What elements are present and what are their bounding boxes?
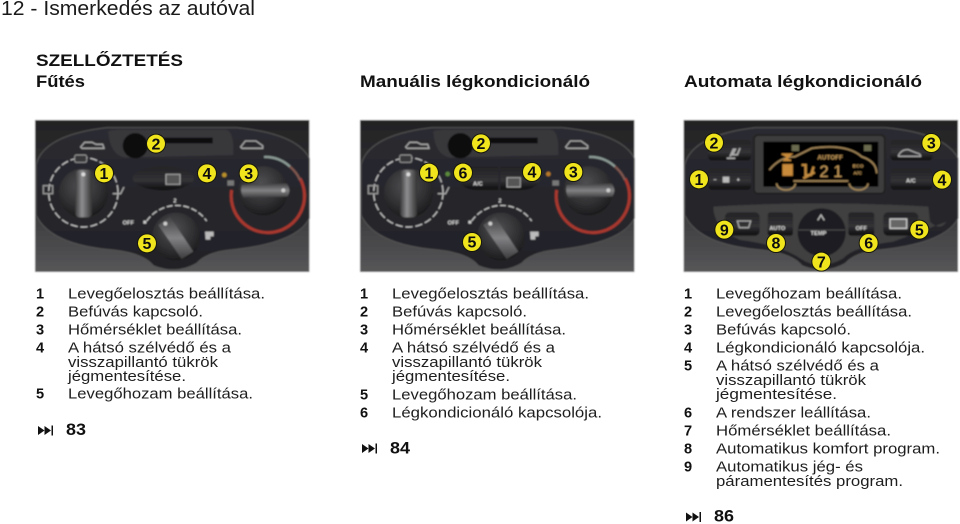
legend: manual AC: 3 — [360, 322, 368, 338]
panel: automatic AC controls photo: A/C — [906, 179, 916, 185]
callouts 1-6 — [419, 133, 583, 252]
column heading: automatic AC: Automata légkondicionáló — [684, 72, 922, 91]
legend: automatic AC: Hőmérséklet beállítása. — [716, 424, 891, 440]
panel: heating controls photo: 2 — [173, 198, 176, 204]
legend: heating: jégmentesítése. — [67, 369, 186, 385]
panel: automatic AC controls photo: ECO — [853, 164, 864, 170]
legend: automatic AC: Automatikus jég- és — [716, 460, 863, 476]
legend: automatic AC: Légkondicionáló kapcsolója. — [716, 340, 925, 356]
panel: automatic AC controls photo: TEMP — [811, 231, 827, 237]
callouts 1-9: 5 — [915, 222, 924, 239]
legend: automatic AC: 3 — [684, 322, 692, 338]
legend: heating: Levegőhozam beállítása. — [68, 386, 253, 402]
legend: automatic AC: 4 — [684, 340, 693, 356]
panel: manual AC controls photo — [355, 115, 642, 275]
legend: automatic AC: 2 — [684, 304, 692, 320]
panel: manual AC controls photo: A/C — [473, 182, 483, 188]
callouts 1-6: 3 — [569, 165, 578, 182]
legend: automatic AC: A rendszer leállítása. — [716, 406, 871, 422]
legend: manual AC: Légkondicionáló kapcsolója. — [392, 406, 602, 422]
legend: manual AC: Befúvás kapcsoló. — [392, 304, 527, 320]
legend: heating: 5 — [36, 386, 44, 402]
callouts 1-9: 4 — [938, 172, 947, 189]
legend: automatic AC: páramentesítés program. — [716, 474, 903, 490]
callouts 1-6: 6 — [459, 165, 468, 182]
page reference: 86 — [686, 508, 734, 524]
callouts 1-6: 5 — [468, 235, 477, 252]
section heading: SZELLŐZTETÉS — [36, 51, 183, 70]
panel: heating controls photo: OFF — [123, 220, 135, 226]
legend: heating — [36, 286, 265, 402]
page reference: 83: 83 — [66, 421, 86, 439]
panel: automatic AC controls photo: OFF — [856, 226, 868, 232]
legend: manual AC — [360, 286, 602, 422]
callouts 1-9: 1 — [695, 172, 704, 189]
legend: heating: A hátsó szélvédő és a — [68, 340, 232, 356]
panel: automatic AC controls photo — [679, 115, 960, 275]
legend: heating: 1 — [36, 286, 44, 302]
legend: automatic AC: Automatikus komfort program. — [716, 442, 940, 458]
column heading: heating: Fűtés — [36, 72, 85, 91]
legend: heating: 2 — [36, 304, 44, 320]
legend: manual AC: jégmentesítése. — [391, 369, 510, 385]
legend: automatic AC: Levegőhozam beállítása. — [716, 286, 902, 302]
legend: heating: Hőmérséklet beállítása. — [68, 322, 242, 338]
legend: automatic AC: 6 — [684, 406, 692, 422]
legend: manual AC: Levegőelosztás beállítása. — [392, 286, 589, 302]
legend: manual AC: 1 — [360, 286, 368, 302]
legend: automatic AC: 1 — [684, 286, 692, 302]
column heading: manual AC: Manuális légkondicionáló — [360, 72, 590, 91]
panel: manual AC controls photo: 2 — [498, 198, 501, 204]
page reference: 84: 84 — [390, 440, 411, 458]
callouts 1-9: 6 — [864, 236, 873, 253]
legend: automatic AC: 8 — [684, 442, 692, 458]
panel: automatic AC controls photo: AUTO — [769, 226, 786, 232]
callouts 1-6: 1 — [425, 165, 434, 182]
legend: automatic AC: Levegőelosztás beállítása. — [716, 304, 912, 320]
legend: automatic AC: 5 — [684, 358, 692, 374]
panel: automatic AC controls photo: 2 1 — [819, 162, 842, 181]
panel: automatic AC controls photo: − — [713, 178, 717, 184]
legend: manual AC: A hátsó szélvédő és a — [392, 340, 556, 356]
panel: automatic AC controls photo: AUTOFF — [817, 155, 843, 162]
callouts 1-9: 9 — [720, 222, 729, 239]
callouts 1-5 — [94, 134, 259, 253]
callouts 1-9: 8 — [772, 236, 781, 253]
legend: automatic AC — [684, 286, 940, 490]
callouts 1-6: 4 — [528, 165, 537, 182]
legend: heating: Befúvás kapcsoló. — [68, 304, 203, 320]
legend: heating: Levegőelosztás beállítása. — [68, 286, 265, 302]
page reference: 84 — [362, 440, 411, 458]
legend: manual AC: 4 — [360, 340, 369, 356]
page reference: 83 — [38, 421, 86, 439]
legend: manual AC: Levegőhozam beállítása. — [392, 388, 577, 404]
panel: heating controls photo — [30, 115, 317, 275]
legend: manual AC: 6 — [360, 406, 368, 422]
callouts 1-5: 4 — [203, 166, 212, 183]
legend: automatic AC: A hátsó szélvédő és a — [716, 358, 880, 374]
legend: heating: 4 — [36, 340, 45, 356]
panel: automatic AC controls photo: + — [737, 178, 741, 184]
callouts 1-5: 2 — [152, 136, 161, 153]
panel: automatic AC controls photo: A/C — [853, 170, 862, 176]
callouts 1-9 — [689, 133, 952, 272]
legend: manual AC: 5 — [360, 388, 368, 404]
callouts 1-9: 3 — [927, 136, 936, 153]
callouts 1-5: 1 — [100, 166, 109, 183]
legend: automatic AC: 9 — [684, 460, 692, 476]
legend: heating: 3 — [36, 322, 44, 338]
callouts 1-9: 2 — [710, 135, 719, 152]
legend: manual AC: Hőmérséklet beállítása. — [392, 322, 566, 338]
callouts 1-6: 2 — [477, 136, 486, 153]
callouts 1-5: 5 — [143, 236, 152, 253]
legend: manual AC: 2 — [360, 304, 368, 320]
legend: automatic AC: visszapillantó tükrök — [716, 373, 867, 389]
legend: automatic AC: Befúvás kapcsoló. — [716, 322, 851, 338]
legend: automatic AC: 7 — [684, 424, 692, 440]
legend: automatic AC: jégmentesítése. — [715, 387, 837, 403]
panel: manual AC controls photo: OFF — [448, 220, 460, 226]
legend: heating: visszapillantó tükrök — [68, 355, 219, 371]
callouts 1-9: 7 — [817, 254, 826, 271]
callouts 1-5: 3 — [244, 166, 253, 183]
legend: manual AC: visszapillantó tükrök — [392, 355, 543, 371]
